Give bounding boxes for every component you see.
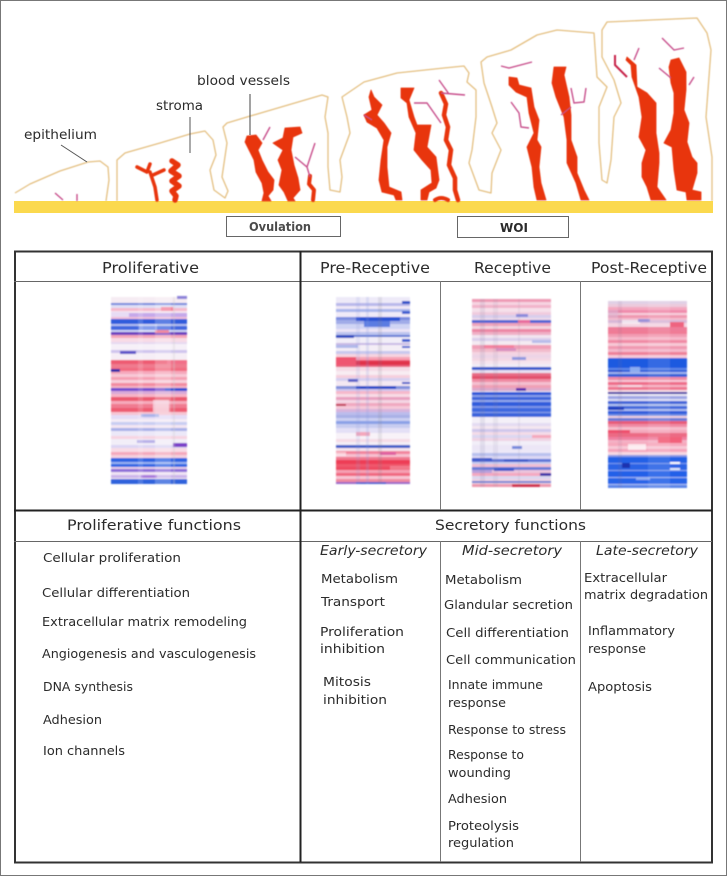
subheaders: secretory stages: Late-secretory [596, 543, 699, 559]
list: mid-secretory functions: Cell communication [446, 652, 576, 667]
label: stroma: stroma [156, 99, 203, 114]
epithelium outline [15, 18, 712, 201]
list: proliferative functions: DNA synthesis [43, 679, 133, 694]
list: late-secretory functions: Extracellular [584, 570, 668, 585]
list: early-secretory functions: Metabolism [321, 571, 398, 586]
list: mid-secretory functions: Glandular secretion [444, 597, 573, 612]
header: functions [67, 518, 586, 534]
label: blood vessels [197, 74, 290, 135]
list: proliferative functions: Extracellular matrix remodeling [42, 614, 247, 629]
header: heatmap phases: Pre-Receptive [320, 259, 430, 277]
subheaders: secretory stages: Early-secretory [320, 543, 428, 559]
list: late-secretory functions: matrix degradation [584, 587, 708, 602]
list: early-secretory functions: Proliferation [320, 624, 404, 639]
list: mid-secretory functions: Metabolism [445, 572, 522, 587]
list: late-secretory functions: Apoptosis [588, 679, 652, 694]
main table grid [14, 251, 712, 862]
list: proliferative functions: Cellular differentiation [42, 585, 190, 600]
list: early-secretory functions: Mitosis [323, 674, 371, 689]
WOI box: WOI [500, 220, 528, 235]
list: early-secretory functions [320, 571, 404, 707]
heatmap: receptive [470, 298, 552, 488]
list: late-secretory functions: response [588, 641, 646, 656]
heatmap: pre-receptive [334, 296, 412, 485]
list: proliferative functions: Angiogenesis and vasculogenesis [42, 646, 256, 661]
list: early-secretory functions: Transport [320, 594, 385, 609]
list: proliferative functions: Ion channels [43, 743, 125, 758]
tissue diagram [14, 18, 713, 238]
list: late-secretory functions: Inflammatory [588, 623, 676, 638]
header: heatmap phases [102, 259, 707, 277]
list: mid-secretory functions: Response to stress [448, 722, 566, 737]
list: early-secretory functions: inhibition [323, 692, 387, 707]
small capillaries [55, 38, 694, 201]
ovulation box: Ovulation [249, 219, 311, 234]
label: epithelium [24, 128, 97, 162]
yellow basal layer [14, 201, 713, 213]
ovulation box [226, 216, 340, 236]
list: early-secretory functions: inhibition [320, 641, 385, 656]
label: epithelium: epithelium [24, 128, 97, 143]
label: blood vessels: blood vessels [197, 74, 290, 89]
list: proliferative functions: Cellular proliferation [43, 550, 181, 565]
list: mid-secretory functions [444, 572, 576, 850]
list: mid-secretory functions: wounding [448, 765, 511, 780]
list: mid-secretory functions: response [448, 695, 506, 710]
list: late-secretory functions [584, 570, 708, 694]
header: functions: Proliferative functions [67, 518, 241, 534]
header: heatmap phases: Proliferative [102, 259, 199, 277]
header: functions: Secretory functions [435, 518, 586, 534]
list: proliferative functions [42, 550, 256, 758]
header: heatmap phases: Post-Receptive [591, 259, 707, 277]
heatmap: proliferative [110, 295, 188, 486]
list: proliferative functions: Adhesion [43, 712, 102, 727]
list: mid-secretory functions: Response to [448, 747, 524, 762]
list: mid-secretory functions: Proteolysis [448, 818, 519, 833]
label: stroma [156, 99, 203, 153]
list: mid-secretory functions: Cell differentiation [446, 625, 569, 640]
subheaders: secretory stages: Mid-secretory [462, 543, 563, 559]
header: heatmap phases: Receptive [474, 259, 551, 277]
blood vessels [137, 55, 701, 201]
WOI box [458, 216, 568, 238]
list: mid-secretory functions: regulation [448, 835, 514, 850]
list: mid-secretory functions: Adhesion [448, 791, 507, 806]
list: mid-secretory functions: Innate immune [448, 677, 543, 692]
subheaders: secretory stages [320, 543, 699, 559]
heatmap: post-receptive [606, 300, 688, 489]
